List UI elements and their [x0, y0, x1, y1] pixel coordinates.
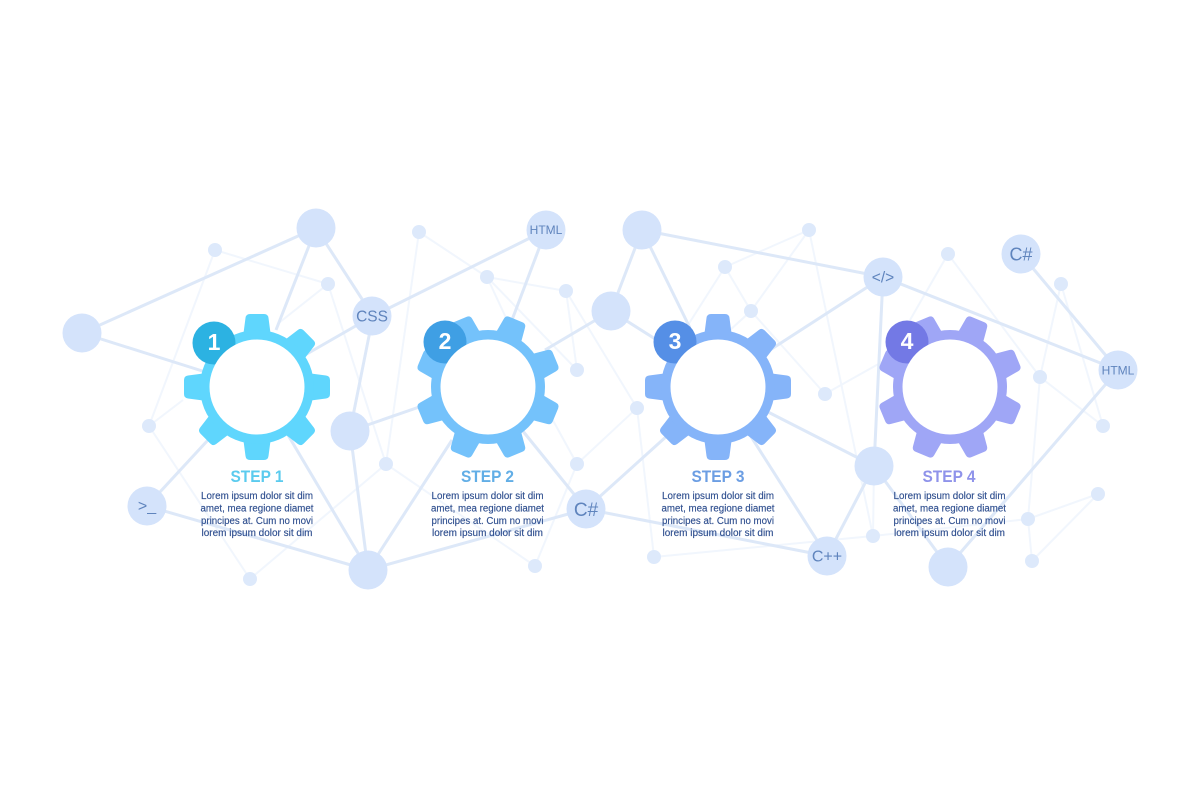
text block: step 2 [431, 491, 544, 539]
text block: step 4: lorem ipsum dolor sit dim [894, 528, 1005, 539]
gear: step 4: 4 [901, 328, 914, 354]
text block: step 3: amet, mea regione diamet [662, 504, 775, 514]
text block: step 2: amet, mea regione diamet [431, 504, 544, 514]
text block: step 1 [200, 491, 314, 539]
node: C# centre [566, 490, 606, 528]
gear: step 2 [415, 314, 561, 460]
text block: step 2: lorem ipsum dolor sit dim [432, 528, 543, 539]
text block: step 1: principes at. Cum no movi [201, 516, 313, 527]
gear: step 1: 1 [208, 329, 221, 355]
node: HTML right [1098, 350, 1138, 390]
text block: step 1: lorem ipsum dolor sit dim [202, 528, 312, 539]
node: C# centre: C# [574, 500, 599, 521]
heading: step 1: STEP 1 [230, 468, 284, 486]
gear: step 3 [645, 314, 791, 460]
text block: step 3: lorem ipsum dolor sit dim [662, 528, 774, 539]
text block: step 3 [662, 491, 775, 539]
heading: step 3: STEP 3 [692, 468, 744, 486]
node: terminal prompt: >_ [138, 498, 157, 515]
node: C++: C++ [812, 548, 842, 566]
node: CSS [352, 296, 392, 336]
text block: step 3: Lorem ipsum dolor sit dim [662, 491, 774, 502]
large network nodes [62, 208, 968, 590]
node: code tag: </> [872, 270, 894, 286]
node: HTML top: HTML [530, 223, 563, 237]
small network nodes [142, 223, 1110, 586]
text block: step 2: Lorem ipsum dolor sit dim [432, 491, 544, 502]
node: C++ [808, 536, 846, 576]
node: code tag [864, 258, 902, 296]
text block: step 4: amet, mea regione diamet [893, 504, 1006, 514]
gear: step 2: 2 [439, 328, 451, 354]
heading: step 2: STEP 2 [461, 468, 514, 486]
node: terminal prompt [128, 486, 166, 526]
gear: step 1 [184, 314, 330, 460]
heading: step 4: STEP 4 [922, 468, 976, 486]
node: HTML top [526, 210, 566, 250]
node: C# right [1002, 234, 1040, 274]
strong network connections [82, 228, 1118, 570]
text block: step 4 [893, 491, 1006, 539]
text block: step 2: principes at. Cum no movi [432, 516, 544, 527]
node: HTML right: HTML [1102, 364, 1135, 378]
text block: step 4: Lorem ipsum dolor sit dim [894, 491, 1006, 502]
text block: step 3: principes at. Cum no movi [662, 516, 774, 527]
node: CSS: CSS [356, 308, 388, 326]
text block: step 4: principes at. Cum no movi [894, 516, 1006, 527]
gear: step 3: 3 [669, 328, 681, 354]
node: C# right: C# [1009, 244, 1033, 264]
faint network connections [149, 230, 1103, 579]
text block: step 1: amet, mea regione diamet [200, 504, 314, 514]
text block: step 1: Lorem ipsum dolor sit dim [201, 491, 313, 502]
gear: step 4 [877, 314, 1023, 460]
